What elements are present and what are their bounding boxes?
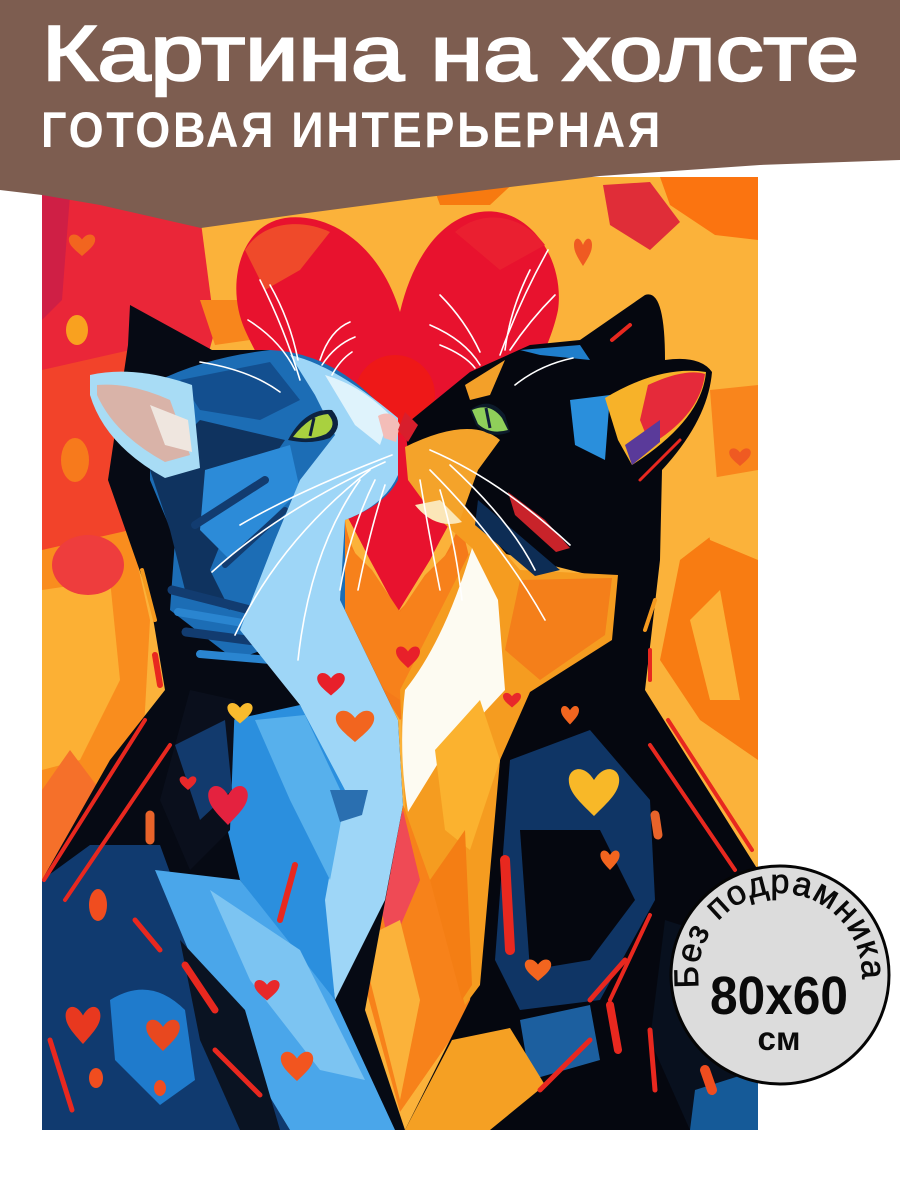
blue cat orange blobs: [89, 889, 166, 1096]
painting background: [42, 177, 758, 1130]
header banner: [0, 0, 900, 228]
badge unit: см: [758, 1020, 800, 1057]
blue cat: [42, 305, 405, 1130]
big red heart: [236, 211, 559, 720]
black cat chest: [400, 480, 618, 1005]
black cat face patches: [398, 345, 610, 576]
black cat red strokes: [505, 325, 752, 1090]
size badge: [670, 864, 890, 1086]
blue cat eye: [288, 410, 338, 442]
badge arc path: [698, 893, 862, 988]
blue cat fur stripes: [172, 480, 285, 660]
black cat ear: [605, 371, 706, 465]
blue cat ear: [90, 372, 200, 478]
blue cat body: [220, 705, 345, 1000]
black calico cat: [398, 294, 758, 1130]
black cat body: [495, 730, 655, 1010]
subtitle: ГОТОВАЯ ИНТЕРЬЕРНАЯ: [41, 103, 660, 159]
small hearts: [66, 235, 751, 1081]
black cat orange arm: [405, 1028, 545, 1130]
banner shape: [0, 0, 900, 228]
blue cat lower body: [42, 845, 290, 1130]
painting: two kissing cats: [42, 177, 758, 1130]
badge curved label: Без подрамника: [674, 874, 880, 986]
blue cat face and chest: [240, 355, 403, 1000]
blue cat head: [150, 350, 398, 660]
gap between cats lower background: [368, 805, 470, 1112]
black cat eye: [470, 404, 510, 435]
black cat silhouette: [405, 294, 758, 1130]
title: Картина на холсте: [42, 9, 859, 97]
blue cat silhouette: [42, 305, 405, 1130]
whiskers: [200, 250, 573, 660]
blue cat red strokes: [44, 570, 295, 1110]
badge size: 80х60: [710, 966, 848, 1026]
